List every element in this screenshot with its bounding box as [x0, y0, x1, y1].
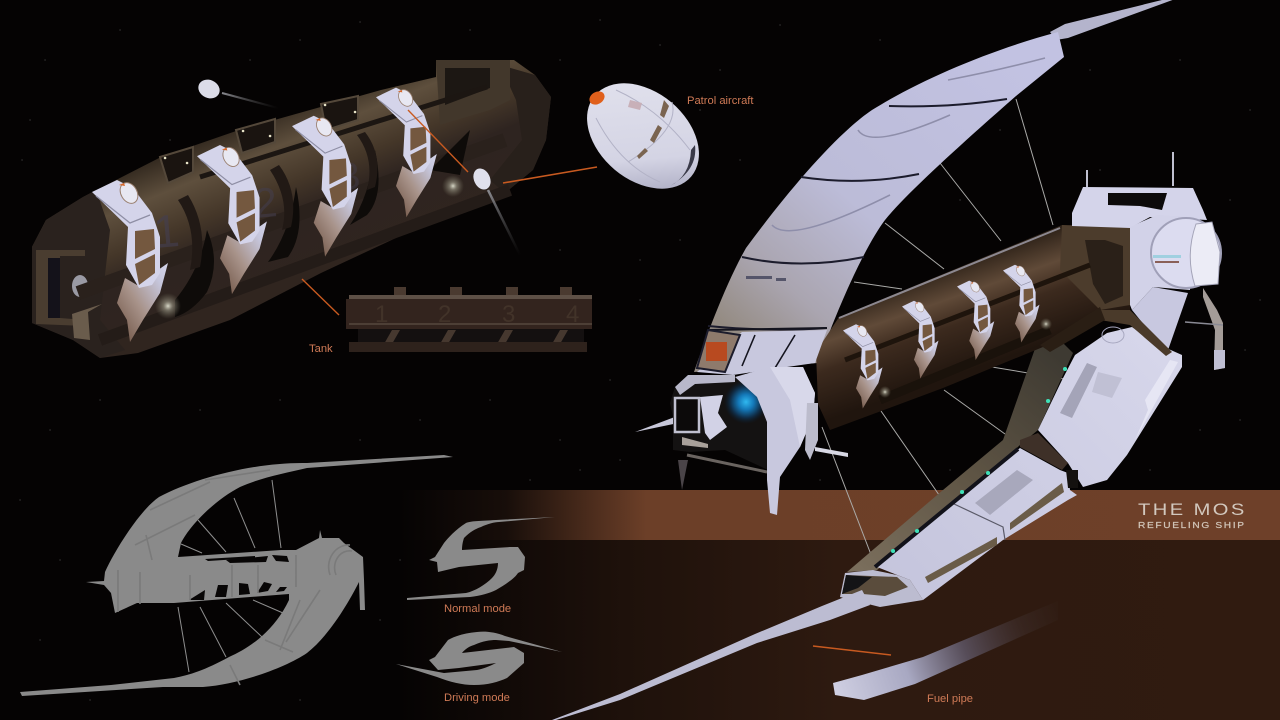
mothership: lower arm lower segment [875, 448, 1078, 600]
fuel pipe detail [833, 601, 1058, 700]
docking pod with trail [470, 166, 520, 255]
tank ship: detail view: 2 [252, 178, 279, 227]
small patrol pod with trail [195, 76, 278, 108]
tank side view [346, 287, 592, 352]
title: THE MOS [1138, 500, 1247, 519]
mothership: central hull [816, 225, 1130, 430]
label: normal mode: Normal mode [444, 603, 511, 615]
silhouette: large side view [20, 455, 453, 696]
mothership: top fuel pipe [1050, 0, 1178, 40]
tank side view: 4 [566, 301, 579, 328]
pointer line: tank [302, 279, 339, 315]
silhouette: normal mode [407, 517, 555, 600]
mothership: bottom fuel pipe [552, 590, 870, 720]
tank side view: 2 [438, 301, 451, 328]
label: driving mode: Driving mode [444, 692, 510, 704]
brown horizontal band [400, 490, 1280, 540]
title: REFUELING SHIP [1138, 521, 1246, 530]
label: patrol aircraft: Patrol aircraft [687, 95, 754, 107]
silhouette: driving mode [396, 632, 562, 685]
mothership: lower arm end opening [840, 570, 923, 607]
title [1138, 500, 1247, 530]
pointer line: patrol aircraft [503, 167, 597, 183]
dark brown lower floor [400, 540, 1280, 720]
tank ship: detail view: 3 [337, 155, 362, 199]
mothership: cables [822, 99, 1064, 565]
mothership: front section [635, 328, 848, 515]
mothership: upper wing [694, 32, 1064, 372]
mothership: lower arm upper segment [1020, 307, 1182, 487]
pointer line: fuel pipe [813, 646, 891, 655]
mothership: rear engine module [1072, 152, 1225, 370]
mothership: orange panel [697, 330, 740, 372]
pointer line: patrol aircraft dock [408, 110, 468, 172]
tank ship: detail view [32, 60, 551, 358]
label: tank: Tank [309, 343, 333, 355]
label: fuel pipe: Fuel pipe [927, 693, 973, 705]
tank side view: 3 [502, 301, 515, 328]
mothership: lower arm inner strip [847, 343, 1073, 572]
tank ship: detail view: 1 [151, 204, 181, 258]
patrol aircraft [566, 62, 720, 210]
mothership: teal lights [893, 369, 1065, 551]
tank side view: 1 [375, 301, 388, 328]
